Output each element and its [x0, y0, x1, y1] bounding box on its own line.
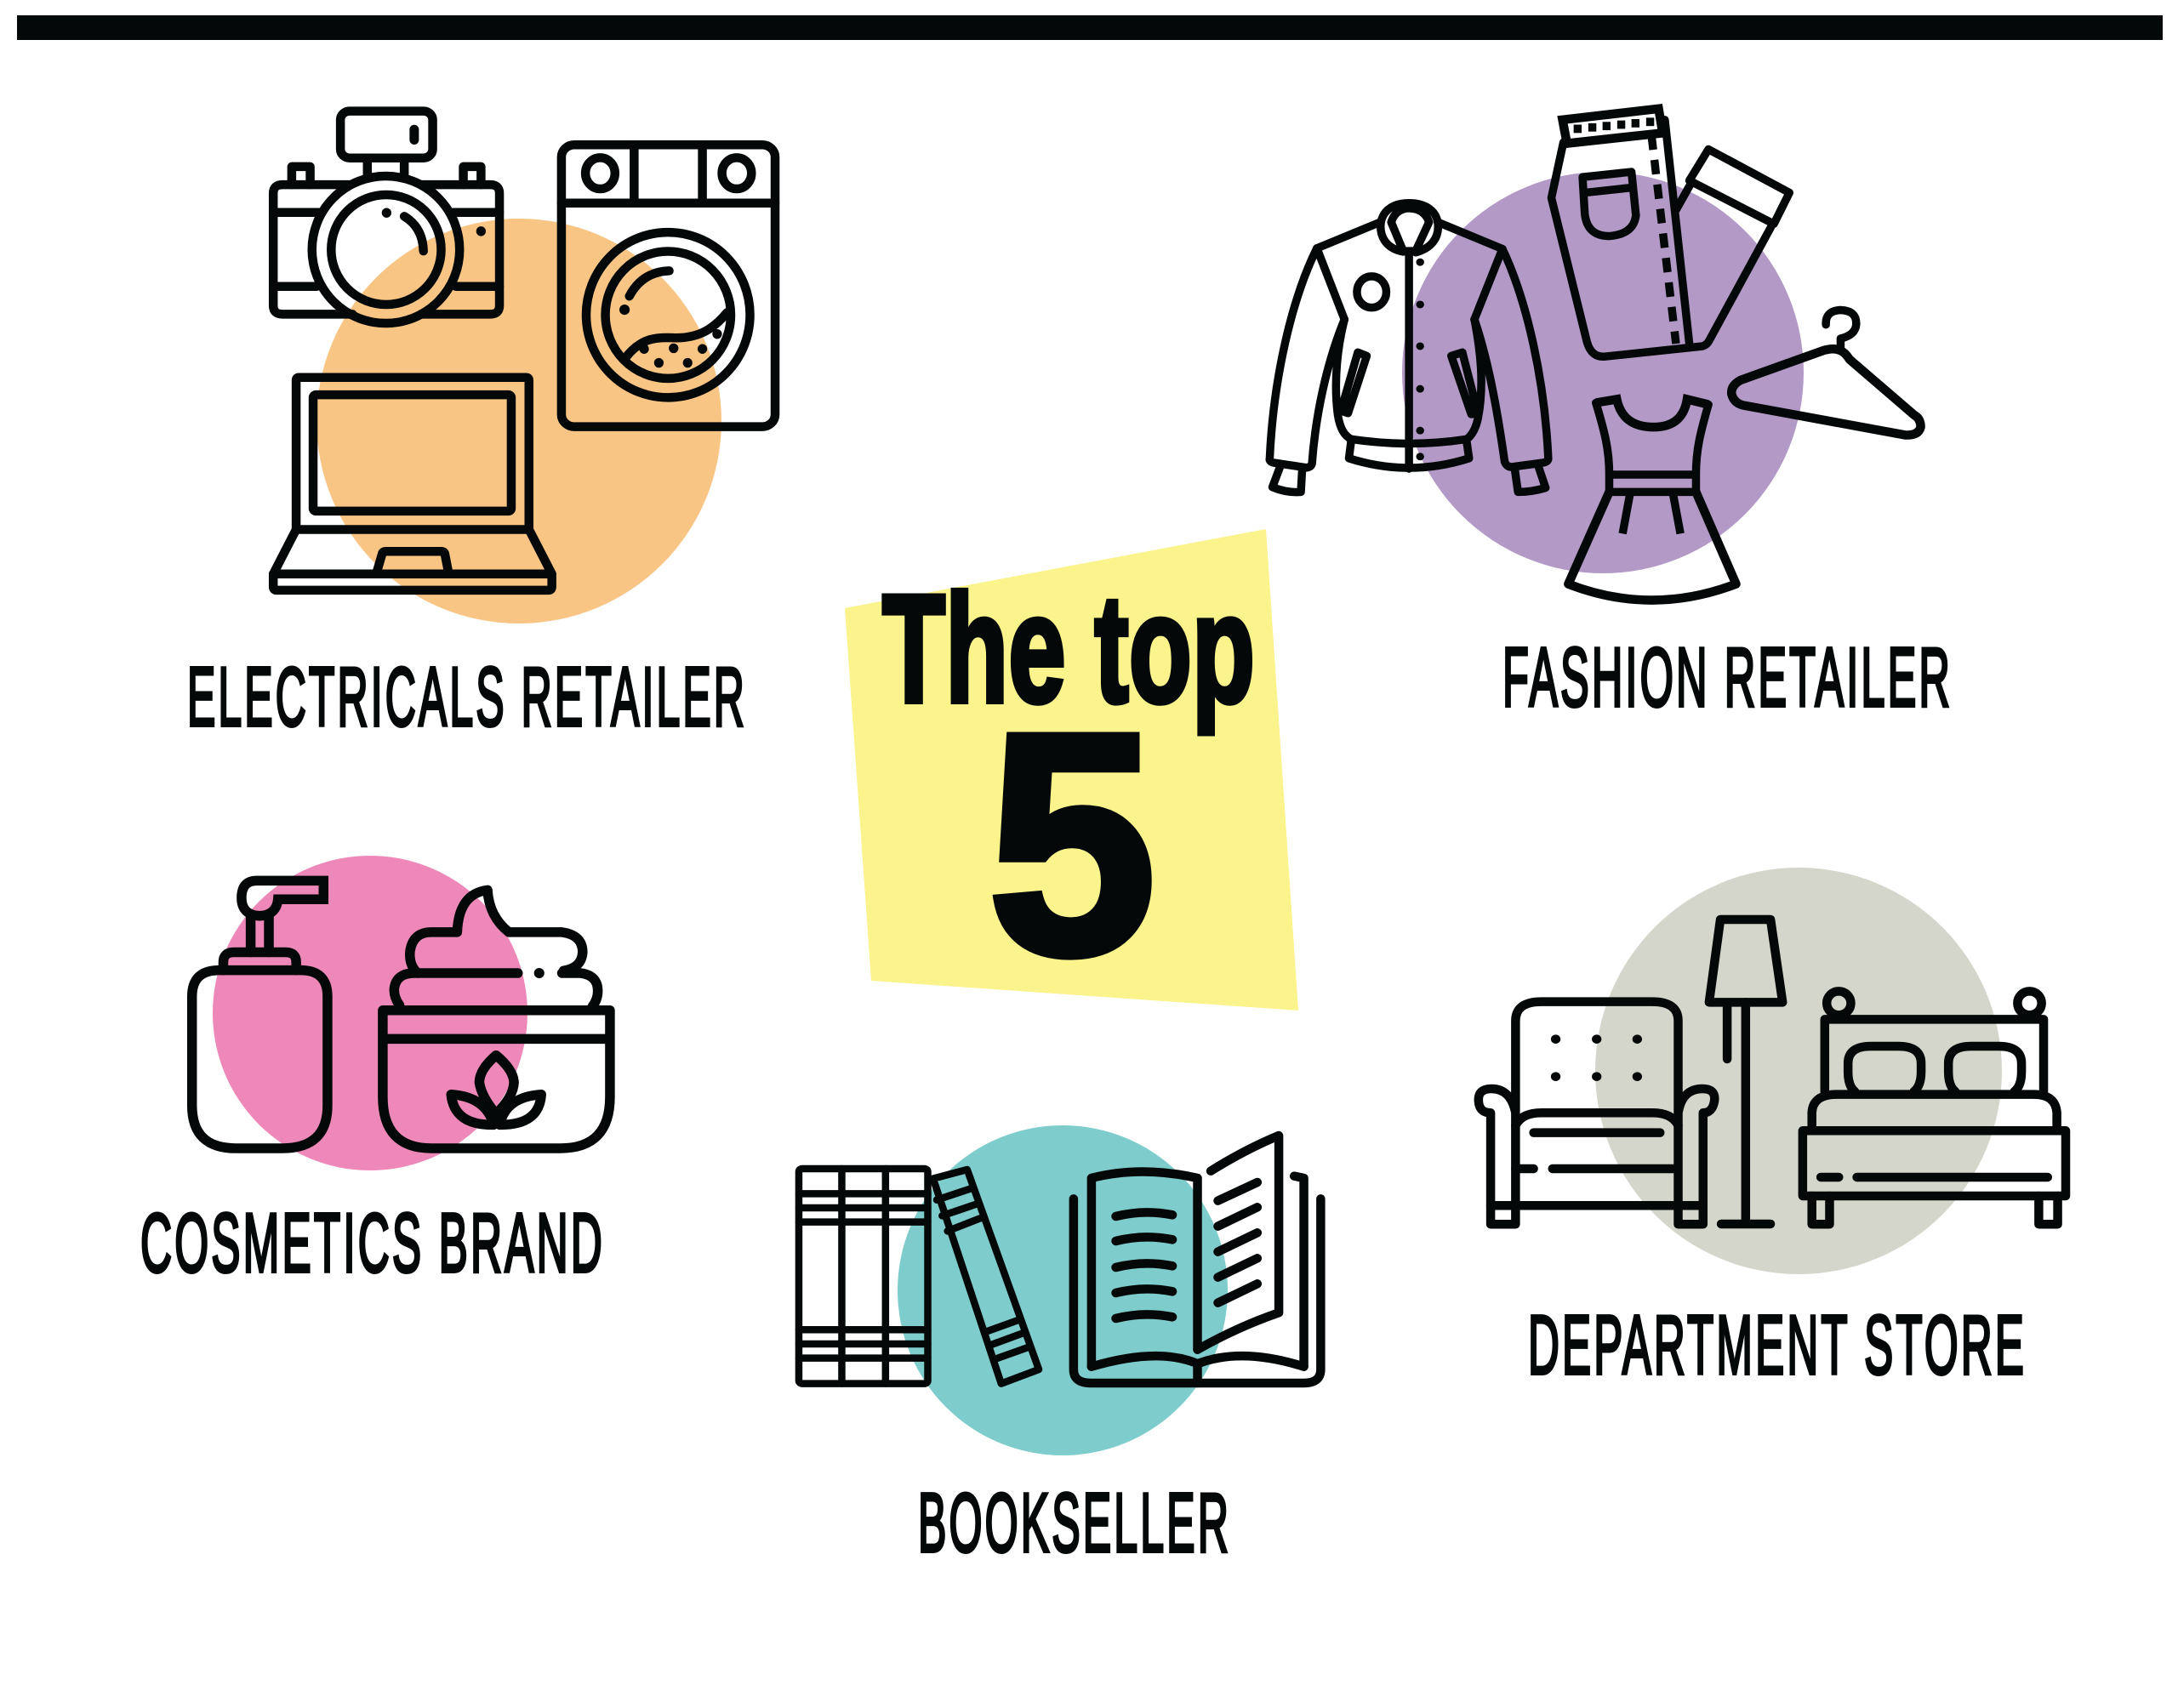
icon: cream jar	[383, 890, 610, 1148]
panel: bookseller	[799, 1125, 1320, 1569]
icon: floor lamp	[1709, 919, 1782, 1224]
panel: the top 5	[845, 529, 1298, 1020]
colour circle: teal	[898, 1125, 1228, 1455]
colour circle: purple	[1402, 172, 1804, 573]
label: bookseller: BOOKSELLER	[918, 1476, 1231, 1569]
heading: the top: The top	[882, 563, 1255, 735]
icon: laptop	[273, 378, 552, 590]
panel: department store	[1479, 868, 2066, 1392]
icon: row of books	[799, 1169, 928, 1384]
yellow note	[845, 529, 1298, 1011]
panel: electricals retailer	[187, 111, 775, 743]
colour circle: grey	[1595, 868, 2002, 1274]
colour circle: pink	[213, 856, 527, 1170]
icon: leaning book	[933, 1170, 1039, 1384]
icon: jacket	[1269, 203, 1548, 492]
heading: 5: 5	[988, 668, 1156, 1020]
icon: dress	[1568, 399, 1736, 601]
icon: camera	[273, 111, 499, 323]
label: electricals retailer: ELECTRICALS RETAILER	[187, 650, 747, 743]
icon: open book	[1074, 1136, 1320, 1383]
colour circle: orange	[316, 219, 721, 623]
icon: jeans	[1551, 109, 1789, 356]
icon: pump bottle	[192, 880, 328, 1148]
panel: fashion retailer	[1269, 109, 1953, 724]
panel: cosmetics brand	[140, 856, 610, 1290]
top bar	[17, 15, 2163, 40]
icon: hanger	[1731, 310, 1921, 436]
icon: washing machine	[562, 145, 775, 427]
icon: bed	[1803, 991, 2066, 1224]
label: cosmetics brand: COSMETICS BRAND	[140, 1196, 605, 1290]
icon: armchair	[1479, 1002, 1714, 1224]
